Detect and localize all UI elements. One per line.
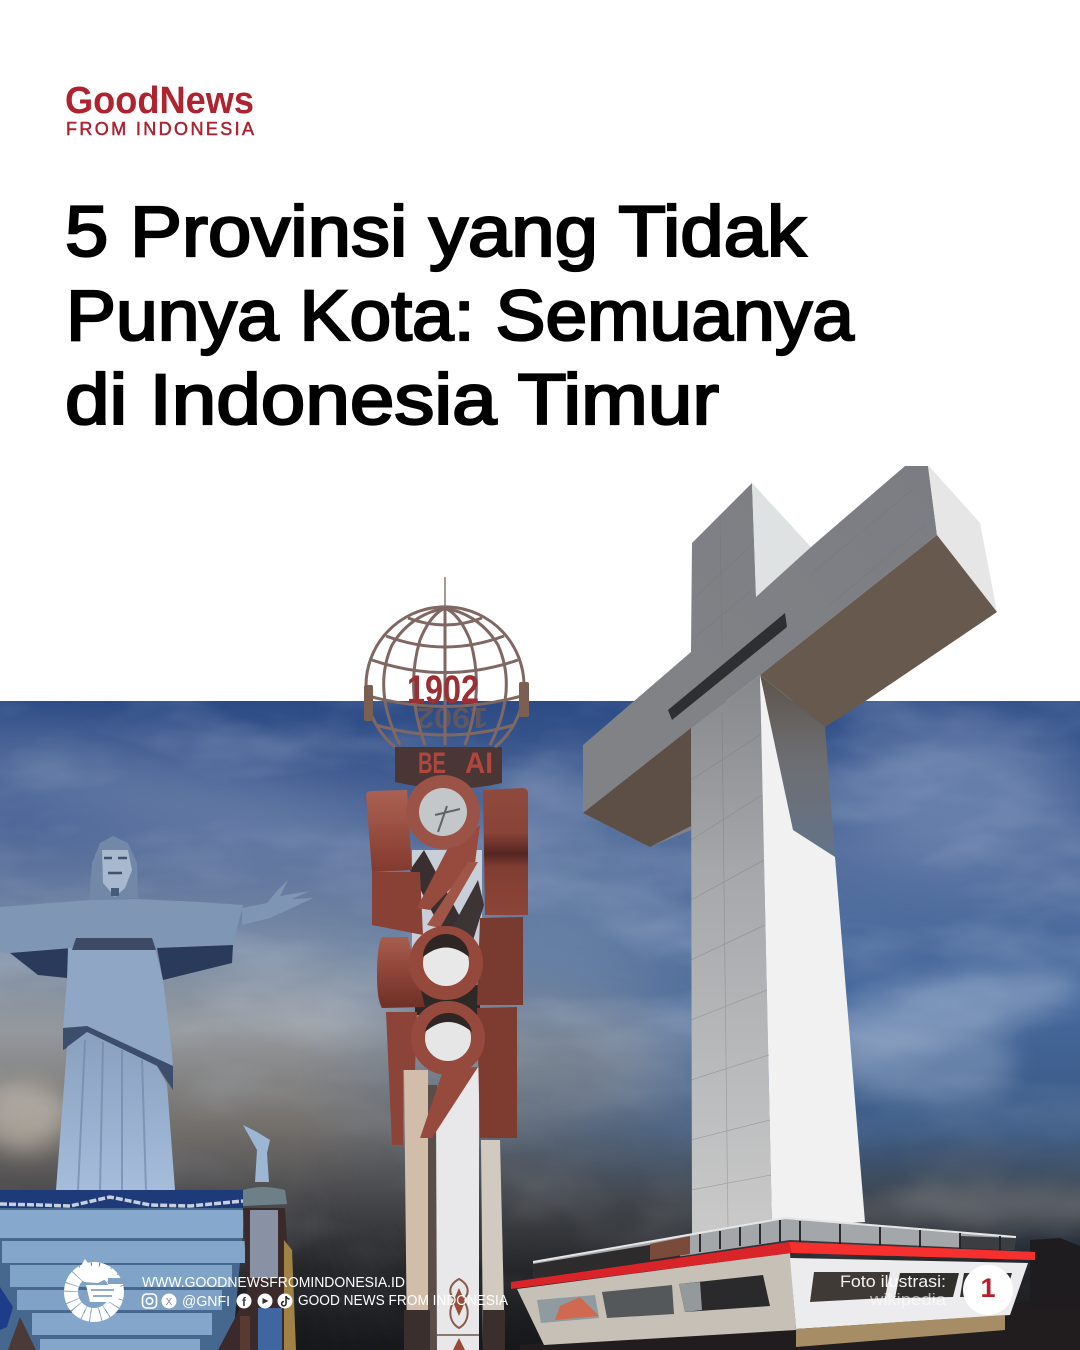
patterned column (218, 1187, 296, 1350)
shaft left face (691, 675, 772, 1234)
ring band with letters: BE (418, 747, 446, 780)
footer: tiktok icon (278, 1294, 292, 1308)
slit window (668, 613, 787, 720)
statue robe (63, 948, 173, 1067)
title: Punya Kota: Semuanya (66, 277, 855, 356)
right arm underside (760, 535, 997, 727)
brand logo: GoodNews (65, 80, 254, 122)
numeral 6 (416, 925, 476, 993)
rust blocks (366, 788, 528, 1145)
footer: X icon: X (166, 1297, 173, 1308)
small angel (243, 1125, 270, 1182)
building left wall (517, 1253, 796, 1345)
footer: youtube icon (258, 1294, 272, 1308)
white end of upper post (752, 483, 811, 597)
shaft shadow face (760, 675, 835, 857)
right arm end face (928, 465, 997, 612)
footer: GNFI logo mark (71, 1259, 126, 1315)
photo: giant cross (583, 465, 997, 1234)
statue pedestal (0, 1190, 245, 1350)
footer: X icon (162, 1294, 176, 1308)
numeral 9 clock (406, 775, 480, 928)
brand logo: FROM INDONESIA (66, 119, 254, 139)
brand logo (65, 80, 254, 139)
photo: 1969 monument (364, 577, 529, 1350)
footer: website url: WWW.GOODNEWSFROMINDONESIA.ID (142, 1275, 405, 1291)
statue arms and cape (0, 899, 243, 953)
shaft white face (760, 675, 865, 1228)
globe side brackets (364, 682, 529, 721)
panel seams (691, 490, 925, 1230)
photo credit (840, 1272, 947, 1309)
building right wall (790, 1258, 1028, 1329)
title (65, 193, 855, 440)
tan footing (796, 1315, 1005, 1347)
mirrored year on globe: 1902 (416, 701, 488, 733)
statue right hand (242, 880, 313, 925)
windows left wall (537, 1295, 599, 1323)
title: di Indonesia Timur (65, 361, 719, 440)
page number badge: 1 (980, 1273, 996, 1303)
red fascia (511, 1242, 1035, 1289)
photo: cross base building (511, 1218, 1080, 1350)
footer: channel name: GOOD NEWS FROM INDONESIA (298, 1293, 508, 1309)
cape underside shadow (10, 945, 233, 980)
footer: handle: @GNFI (182, 1294, 230, 1310)
footer: instagram icon (142, 1294, 156, 1308)
page number badge (963, 1265, 1013, 1315)
railing (533, 1218, 1016, 1278)
left arm underside (583, 728, 691, 847)
year 1902: 1902 (407, 668, 479, 712)
photo credit: Foto ilustrasi: (840, 1272, 946, 1291)
photo: Christ statue (0, 836, 313, 1350)
photo background: sky (0, 701, 1080, 1350)
footer: facebook icon (236, 1294, 252, 1309)
ground (520, 1300, 1080, 1350)
upper arm faces (583, 466, 937, 847)
struts between numerals (412, 850, 482, 950)
globe wireframe (365, 577, 525, 747)
title: 5 Provinsi yang Tidak (65, 193, 807, 272)
footer: facebook icon: f (242, 1295, 247, 1309)
numeral 9 lower (418, 1008, 478, 1138)
ring band with letters: AI (465, 747, 493, 780)
photo credit: wikipedia (869, 1290, 947, 1309)
clock face (419, 788, 467, 836)
ring band with letters (395, 747, 502, 789)
statue head (89, 836, 138, 900)
ornament tile (437, 1279, 479, 1350)
tower columns (404, 1070, 430, 1350)
windows right wall (810, 1272, 890, 1302)
